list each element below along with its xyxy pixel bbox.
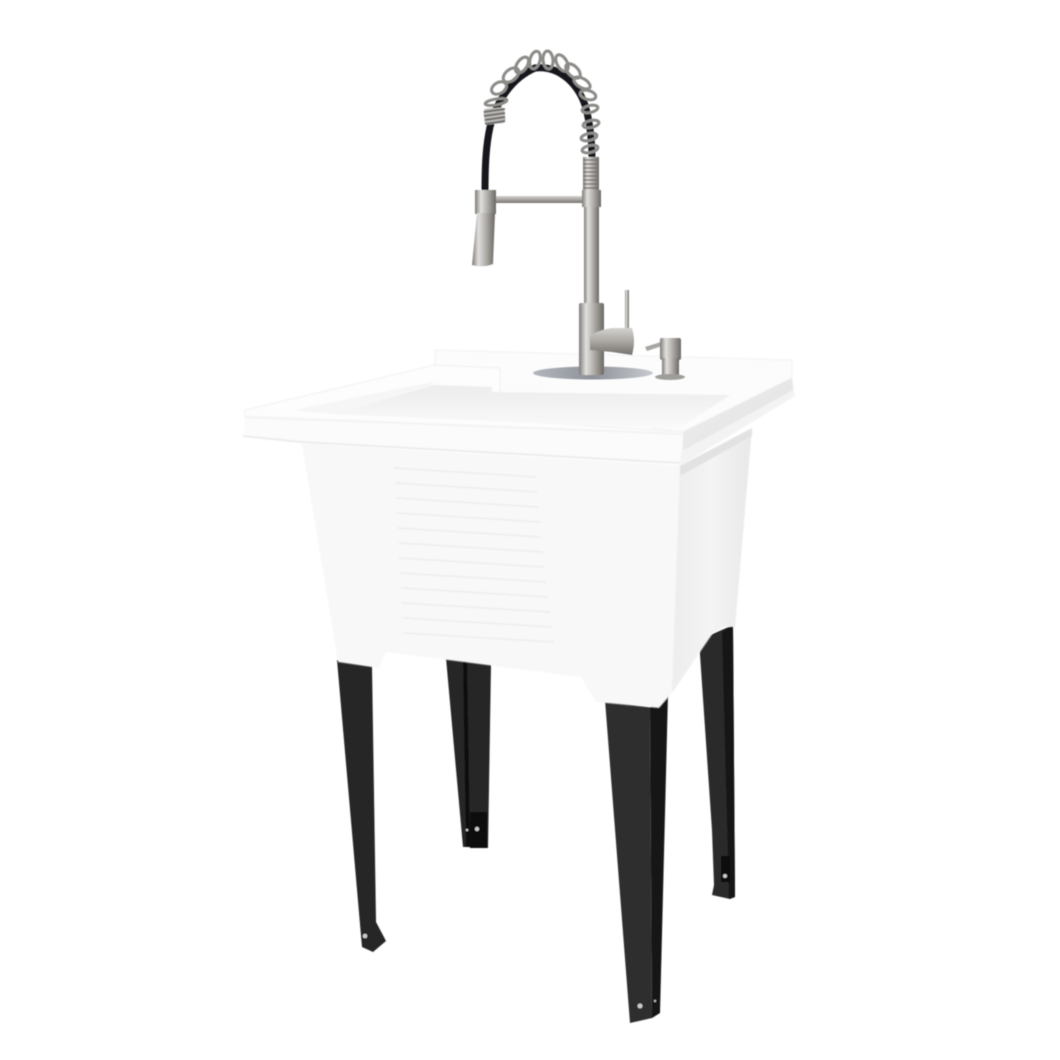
base tight spring	[583, 157, 599, 191]
hose	[485, 68, 592, 192]
handle hub	[590, 328, 634, 355]
tub	[243, 350, 795, 708]
spring coils	[485, 50, 600, 154]
rim front band	[243, 415, 683, 466]
front left leg	[337, 660, 386, 952]
sprayer head	[472, 213, 495, 266]
collar	[582, 190, 601, 207]
tub body: front	[302, 444, 680, 708]
front right leg	[605, 693, 668, 1023]
body shadow under right rim	[680, 428, 752, 476]
basin interior	[332, 385, 730, 428]
raised back deck	[435, 350, 792, 432]
back right leg	[699, 625, 735, 899]
rim right flange	[680, 390, 795, 466]
back left leg	[446, 658, 491, 848]
legs	[337, 625, 735, 1023]
soap dispenser	[645, 338, 685, 380]
upper tight spring	[483, 107, 506, 125]
rim top	[245, 365, 683, 440]
handle lever	[625, 290, 629, 330]
rim right band	[682, 378, 794, 462]
faucet	[472, 50, 685, 380]
faucet base	[579, 303, 604, 375]
vertical pipe	[584, 200, 599, 305]
tub body: right side	[672, 428, 752, 693]
cross arm	[494, 196, 586, 203]
basin left shelf	[293, 382, 435, 414]
washboard panel	[394, 468, 554, 642]
sprayer collar	[475, 190, 496, 214]
deck plate	[533, 366, 653, 380]
